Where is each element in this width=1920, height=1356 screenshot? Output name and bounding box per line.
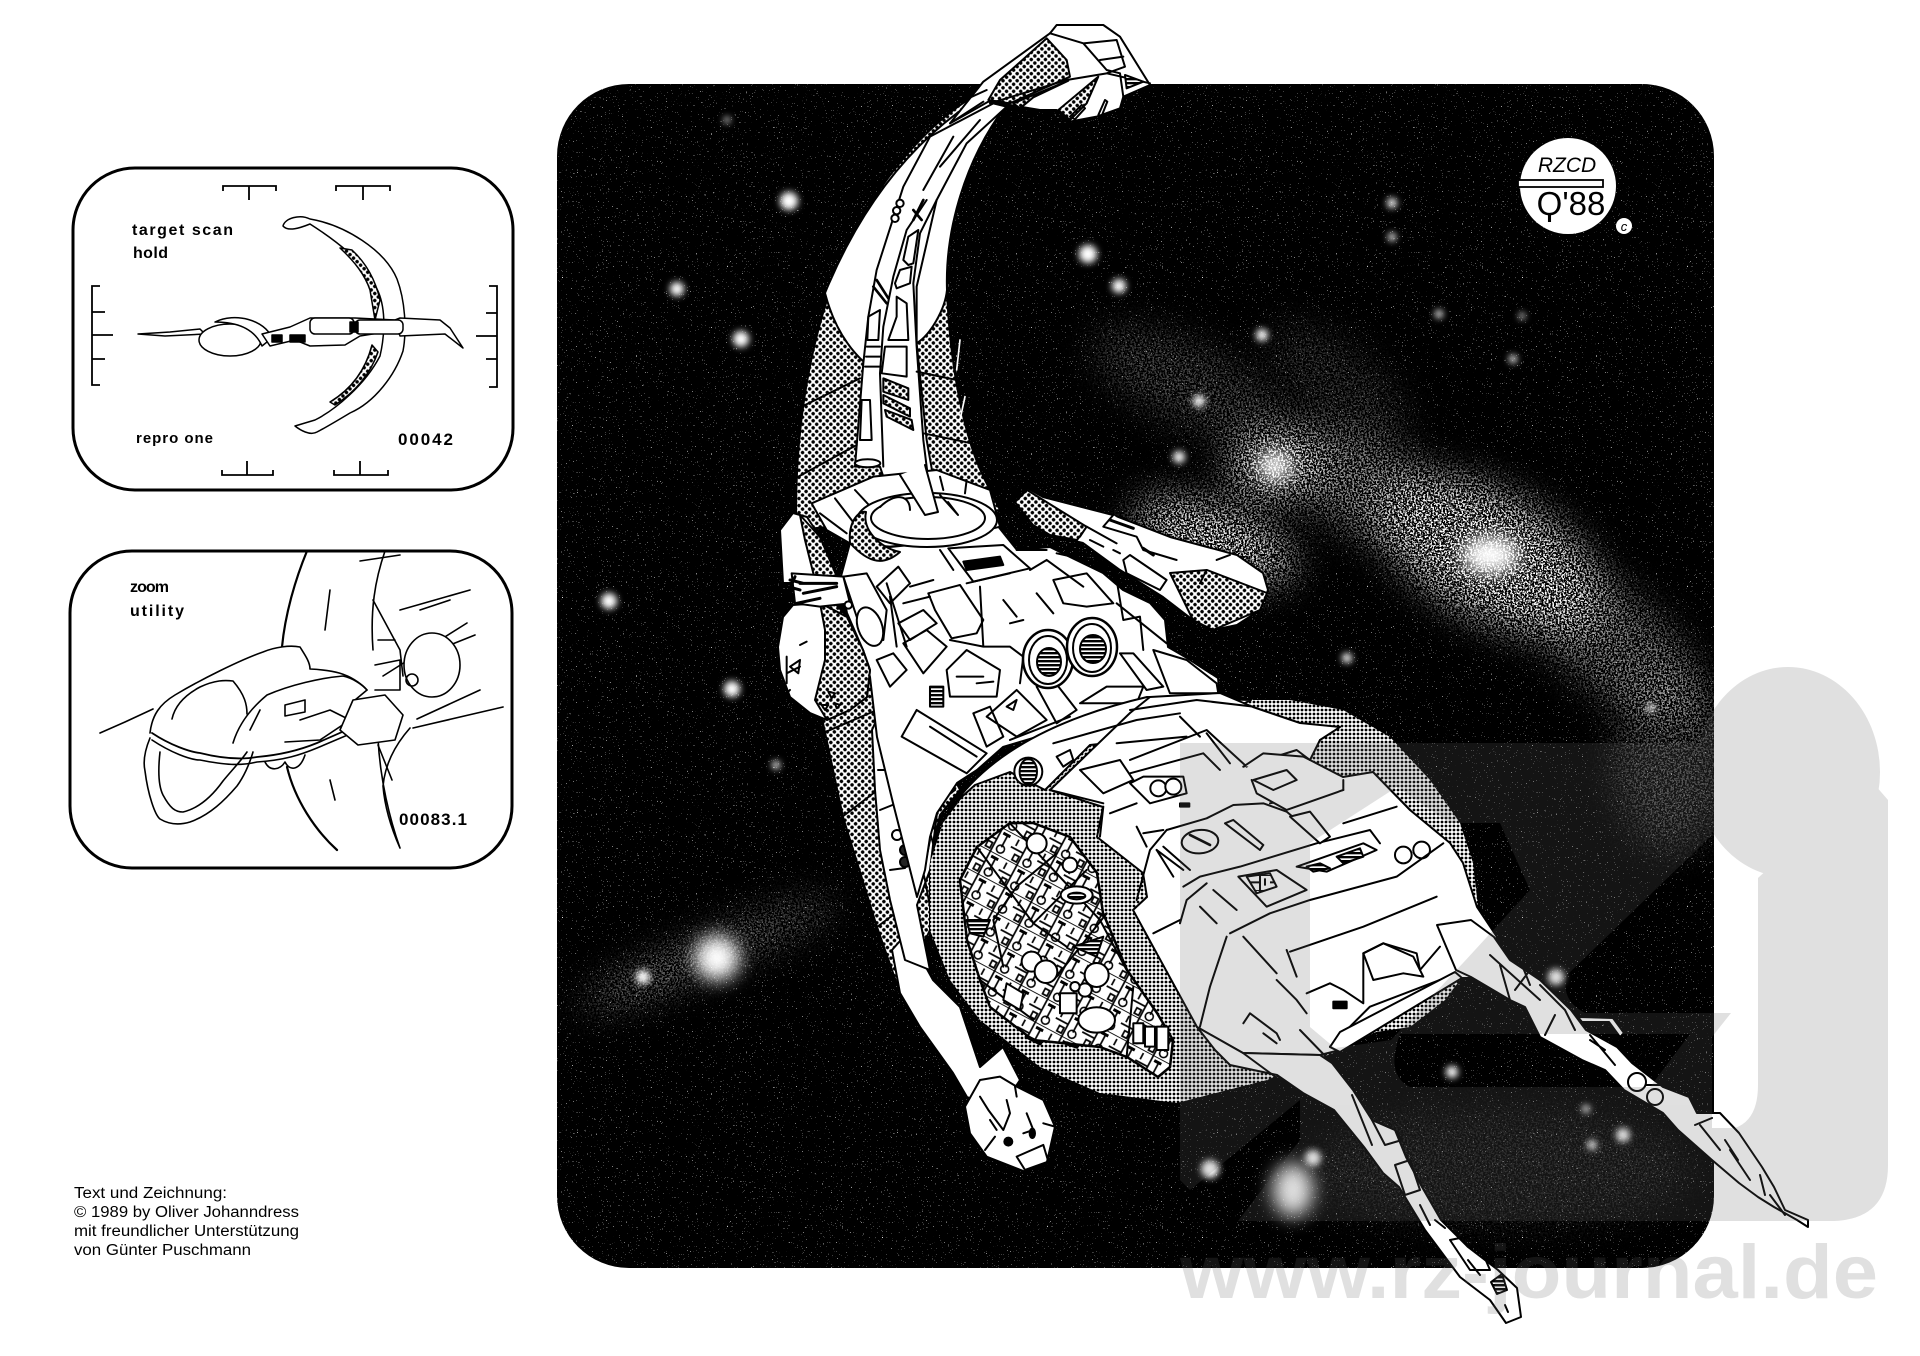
crescent head	[950, 25, 1150, 123]
cockpit interior cutaway	[960, 823, 1173, 1077]
credits text block	[74, 1185, 299, 1259]
crescent spine	[798, 103, 1007, 497]
badge text bottom: Ϙ'88	[1537, 185, 1605, 222]
bottom pod	[965, 1077, 1055, 1172]
panel: starfield background	[557, 84, 1729, 1268]
lower white strip	[892, 933, 1020, 1110]
hull	[1014, 693, 1497, 1070]
credits text block: von Günter Puschmann	[74, 1242, 251, 1259]
main long leg	[1197, 1027, 1521, 1323]
main body	[840, 525, 1220, 897]
top plate	[812, 470, 1000, 547]
upper crescent arm	[796, 89, 1007, 530]
right weapon pod	[1015, 488, 1268, 630]
left lower side pod	[778, 603, 870, 720]
label: zoom: zoom	[130, 579, 169, 596]
dome platform	[850, 465, 997, 561]
main disc	[930, 700, 1478, 1103]
watermark: rzi logo and url	[1179, 667, 1888, 1315]
starship illustration	[778, 25, 1808, 1323]
second leg	[1437, 920, 1808, 1227]
watermark url: www.rz-journal.de	[1179, 1230, 1878, 1315]
credits text block: mit freundlicher Unterstützung	[74, 1223, 299, 1240]
label: target scan: target scan	[132, 222, 233, 239]
targeting brackets	[92, 186, 497, 475]
watermark letter i dot	[1696, 667, 1880, 877]
credits text block: © 1989 by Oliver Johanndress	[74, 1204, 299, 1221]
twin engine nozzles	[1023, 618, 1117, 688]
badge text top: RZCD	[1538, 154, 1596, 177]
milky way nebula	[571, 303, 1729, 1230]
crescent white lobe	[825, 90, 1005, 363]
badge divider bar	[1518, 180, 1603, 187]
zoomed ship drawing	[100, 551, 503, 850]
panel: zoom utility inset	[70, 551, 512, 868]
large glowing stars	[695, 452, 1518, 1216]
side connector mechanics	[785, 573, 852, 609]
label: hold: hold	[133, 245, 168, 262]
lower crescent arm	[796, 560, 960, 993]
label: repro one: repro one	[136, 430, 213, 447]
disc outer ring	[955, 697, 1251, 803]
bright stars	[601, 117, 1655, 1178]
label: 00042: 00042	[398, 430, 453, 449]
credits text block: Text und Zeichnung:	[74, 1185, 227, 1202]
copyright dot: c	[1621, 219, 1628, 234]
top-view ship diagram	[138, 217, 463, 433]
watermark letters r, z and i stem	[1180, 743, 1888, 1221]
left upper side pod	[780, 513, 837, 583]
logo badge RZCD '88	[1518, 138, 1632, 234]
lower spine mechanics	[872, 683, 960, 970]
label: 00083.1: 00083.1	[399, 810, 467, 829]
star speckle noise	[557, 84, 1714, 1268]
label: utility: utility	[130, 603, 184, 620]
underside hull edge	[1330, 972, 1462, 1052]
panel: target scan inset	[73, 168, 513, 490]
